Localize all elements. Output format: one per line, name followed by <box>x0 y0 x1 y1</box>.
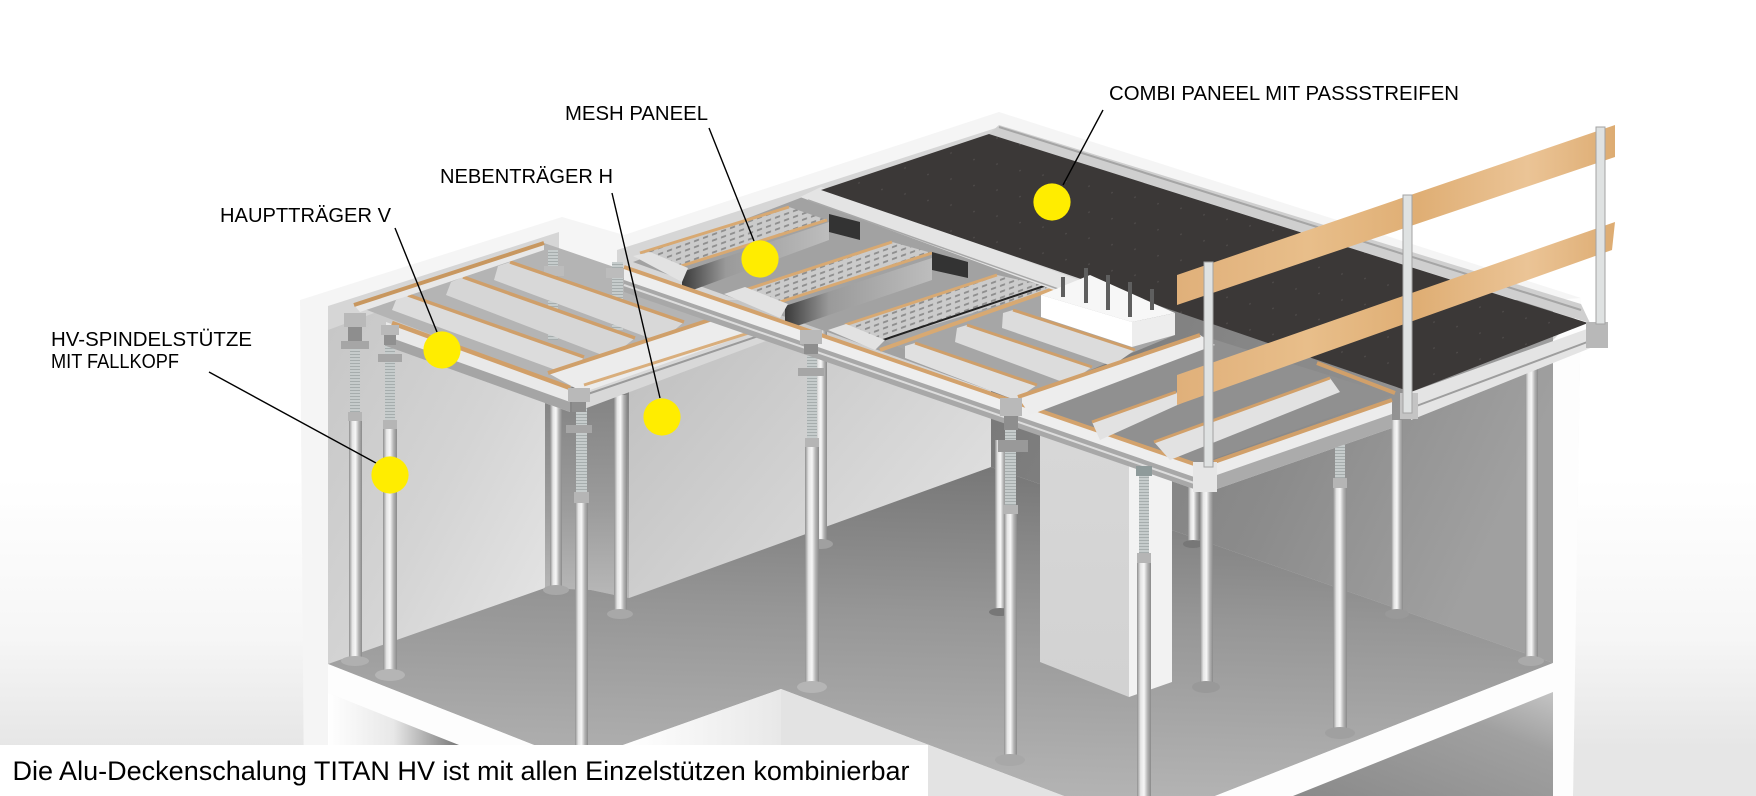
concrete column <box>1040 395 1172 697</box>
main beam long <box>624 267 1197 490</box>
slab front right <box>1215 663 1553 796</box>
wall: right dark <box>991 300 1553 663</box>
building shell <box>300 112 1581 796</box>
caption <box>0 745 928 796</box>
prop 8 <box>1325 430 1355 739</box>
rail posts <box>1204 127 1605 467</box>
deck frame <box>341 125 1608 492</box>
mesh panel 3 <box>828 275 1056 350</box>
yellow markers <box>371 183 1071 494</box>
beam along combi edge <box>1317 363 1395 393</box>
props front <box>341 325 1355 796</box>
wall: centre <box>629 300 991 598</box>
label: spindelstütze: MIT FALLKOPF <box>51 350 179 373</box>
corner brackets <box>341 313 1608 492</box>
label: nebenträger: NEBENTRÄGER H <box>440 165 613 188</box>
prop 2 <box>375 345 405 681</box>
label: mesh paneel: MESH PANEEL <box>565 102 708 125</box>
lower timber board <box>1177 222 1615 405</box>
back spindles <box>544 250 626 340</box>
prop 4 <box>797 350 827 693</box>
marker: nebenträger <box>643 398 681 436</box>
deck 1 infill <box>354 243 740 388</box>
frame beam right of deck 1 <box>548 310 774 412</box>
frame beam left front <box>386 322 570 412</box>
cross beams deck 4 <box>1092 378 1340 460</box>
mesh panel 1 <box>633 207 860 294</box>
mesh panel 2 <box>724 242 968 330</box>
prop 5 <box>995 430 1025 766</box>
cross beams deck 3 <box>905 310 1135 400</box>
beam from column <box>1018 335 1215 415</box>
floor <box>328 467 1553 796</box>
building section <box>300 112 1581 796</box>
prop 1 <box>341 325 369 666</box>
marker: mesh paneel <box>741 240 779 278</box>
top timber board <box>1177 125 1615 305</box>
label: combi paneel: COMBI PANEEL MIT PASSSTREIFEN <box>1109 82 1459 105</box>
prop 7 <box>1137 470 1151 796</box>
dark combi panel <box>800 125 1598 420</box>
label: hauptträger: HAUPTTRÄGER V <box>220 204 391 227</box>
deck 2 infill <box>633 190 1056 397</box>
prop 3 <box>574 400 589 745</box>
upper wall inner faces <box>328 127 1581 680</box>
lower notch right <box>781 689 1064 796</box>
wall: niche <box>545 300 629 598</box>
guard rail <box>1177 125 1615 467</box>
marker: hauptträger <box>423 331 461 369</box>
marker: spindelstütze <box>371 456 409 494</box>
column block with rebars <box>1041 268 1175 347</box>
deck 3 infill <box>883 288 1175 400</box>
wall: left <box>328 250 545 664</box>
label: spindelstütze <box>51 328 252 373</box>
beam front right <box>1214 400 1392 490</box>
slab front left <box>328 664 534 745</box>
callout lines <box>209 110 1103 463</box>
label: spindelstütze: HV-SPINDELSTÜTZE <box>51 328 252 351</box>
props behind <box>543 330 1544 666</box>
right wall face <box>1553 298 1581 796</box>
lower notch <box>623 689 781 745</box>
lower room right <box>1293 692 1553 796</box>
deck 4 infill <box>1018 335 1392 465</box>
frame beam left back <box>354 243 544 312</box>
marker: combi paneel <box>1033 183 1071 221</box>
caption: Die Alu-Deckenschalung TITAN HV ist mit allen Einzelstützen kombinierbar <box>12 756 910 786</box>
lower room left <box>328 693 459 745</box>
prop 6 <box>1192 480 1220 693</box>
cross beams deck 1 <box>392 262 684 376</box>
